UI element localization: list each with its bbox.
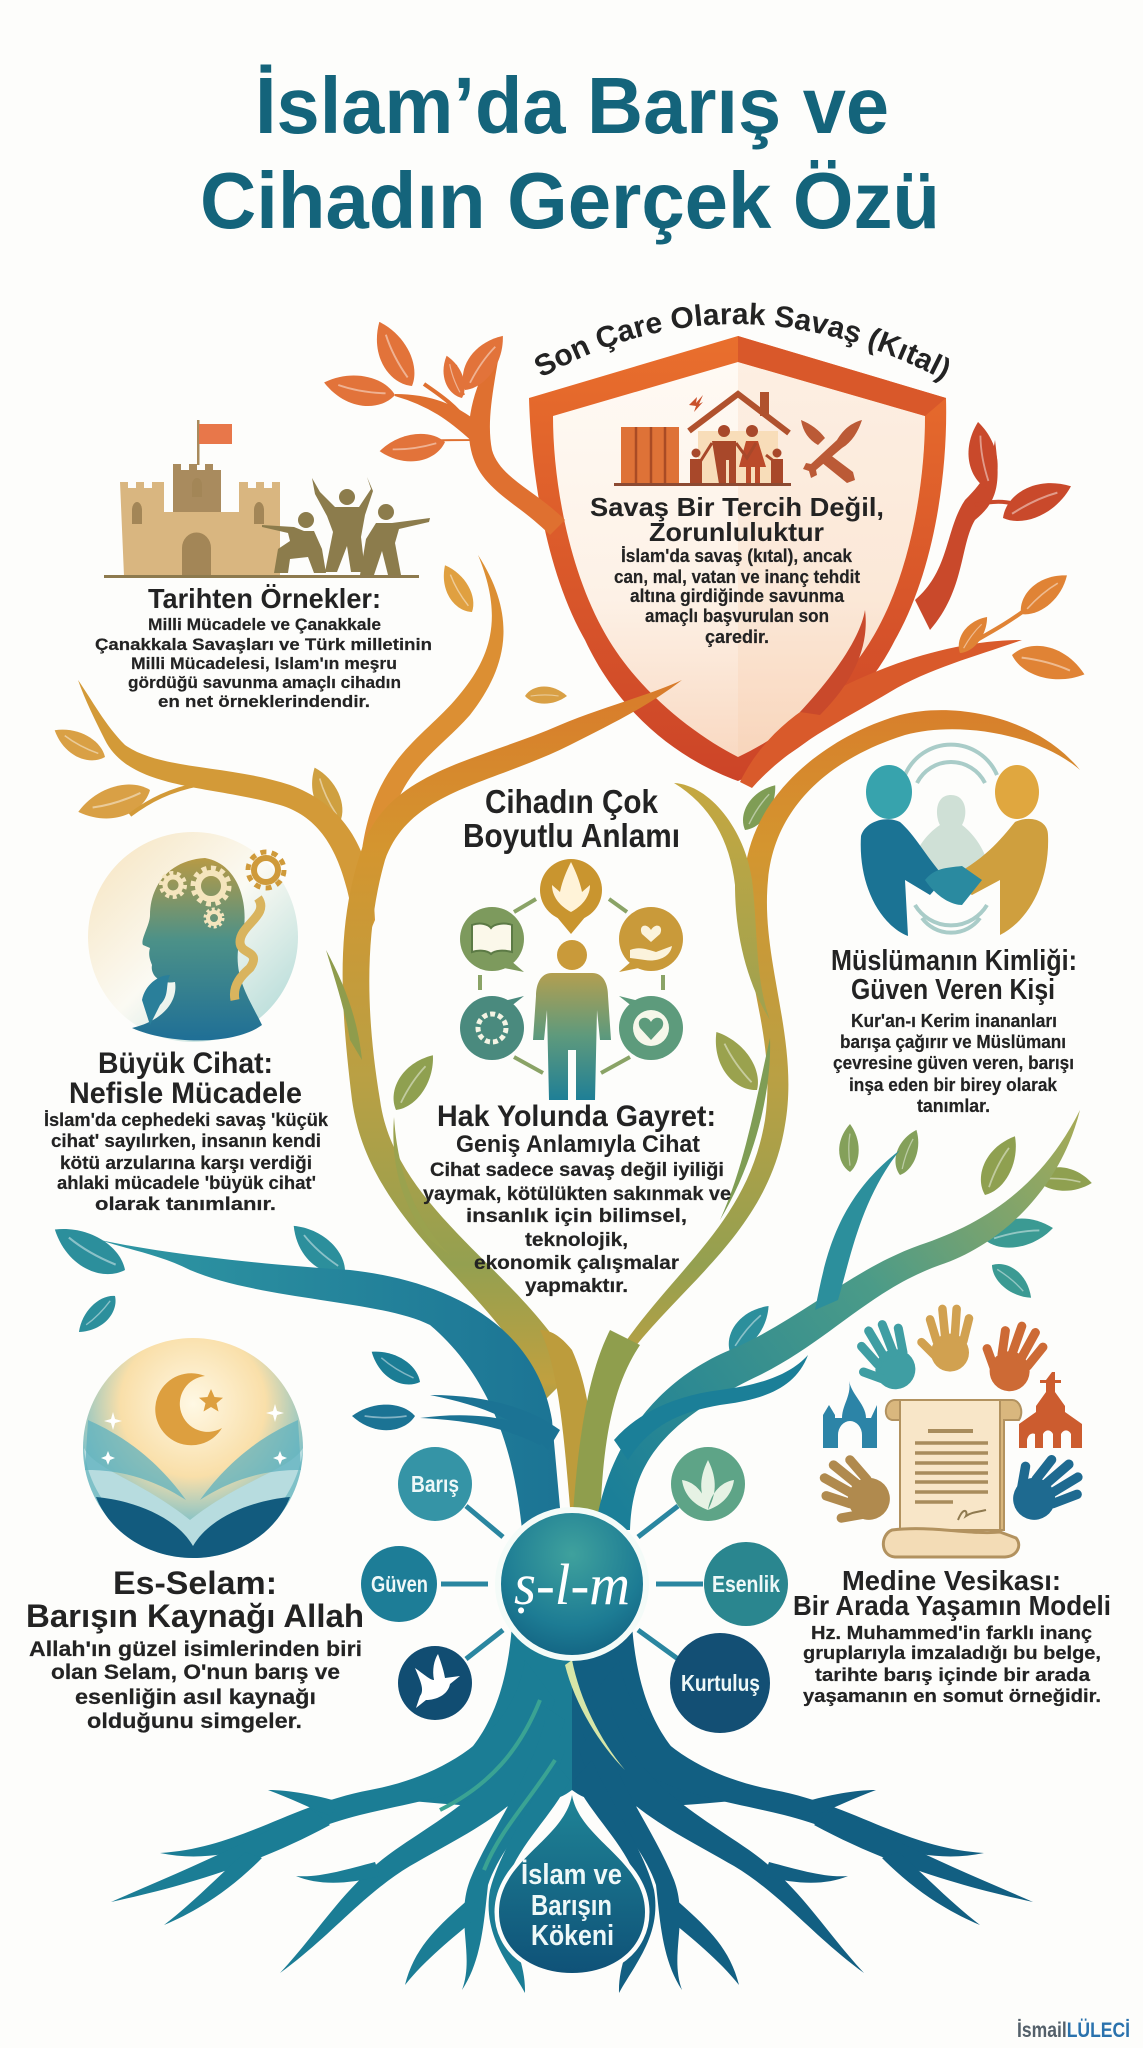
icon: wall, family and swords [614, 392, 862, 486]
icon: head with gears [88, 832, 298, 1042]
text: Büyük Cihat: Nefisle Mücadele [69, 1077, 302, 1110]
text: Müslümanın Kimliği [831, 945, 1077, 1116]
text: Büyük Cihat: kötü arzularına karşı verdiği [60, 1153, 312, 1173]
text: shield: amaçlı başvurulan son [645, 606, 829, 626]
text: Tarihten Örnekler: Milli Mücadele ve Çanakkale [148, 615, 381, 634]
text: Medine Vesikası [793, 1565, 1111, 1706]
text: Hak Yolunda Gayret: insanlık için bilimsel, [466, 1205, 687, 1227]
text: Müslümanın Kimliği: Müslümanın Kimliği: [831, 945, 1077, 977]
root drop label [499, 1795, 645, 1973]
text: Es-Selam: olan Selam, O'nun barış ve [51, 1661, 340, 1684]
title [200, 61, 940, 245]
text: Müslümanın Kimliği: Güven Veren Kişi [851, 974, 1055, 1006]
root drop label: Kökeni [531, 1920, 614, 1952]
node: Barış: Barış [411, 1471, 459, 1497]
text: Medine Vesikası: Medine Vesikası: [842, 1565, 1061, 1596]
text: Hak Yolunda Gayret: ekonomik çalışmalar [474, 1252, 679, 1274]
text: Es-Selam: Es-Selam: [113, 1565, 277, 1601]
text: Tarihten Örnekler: en net örneklerindendir. [158, 692, 370, 711]
shield panel [529, 336, 946, 781]
heading: curved shield title: Son Çare Olarak Savaş (Kıtal) [535, 302, 949, 384]
text: shield: İslam'da savaş (kıtal), ancak [621, 546, 853, 566]
icon: handshake [861, 745, 1048, 936]
heading: Cihadın Çok Boyutlu Anlamı [463, 783, 680, 854]
text: Es-Selam: Barışın Kaynağı Allah [26, 1598, 364, 1634]
text: Tarihten Örnekler [95, 583, 432, 711]
central sphere: s-l-m: ṣ-l-m [514, 1552, 630, 1617]
node: Kurtuluş: Kurtuluş [681, 1670, 760, 1696]
text: shield: çaredir. [705, 627, 769, 647]
node: Esenlik [704, 1542, 788, 1626]
tree: leaves [46, 316, 1093, 1430]
root drop label: İslam ve [521, 1859, 622, 1891]
icon: Medine scroll with hands [811, 1309, 1086, 1557]
text: Hak Yolunda Gayret: Hak Yolunda Gayret: [437, 1100, 716, 1133]
text: Es-Selam: esenliğin asıl kaynağı [75, 1686, 316, 1709]
text: Medine Vesikası: Hz. Muhammed'in farklı inanç [811, 1623, 1092, 1643]
text: Büyük Cihat: cihat' sayılırken, insanın kendi [51, 1131, 321, 1151]
text: Müslümanın Kimliği: çevresine güven veren, barışı [833, 1053, 1074, 1073]
text: Medine Vesikası: yaşamanın en somut örneğidir. [803, 1686, 1101, 1706]
text: Tarihten Örnekler: Milli Mücadelesi, Islam'ın meşru [131, 654, 397, 673]
text: shield [590, 492, 884, 647]
roots [111, 1625, 1033, 1993]
text: shield: altına girdiğinde savunma [630, 586, 845, 606]
icon: crescent and open book [83, 1338, 303, 1558]
node: Esenlik: Esenlik [712, 1571, 780, 1597]
panel: castle and soldiers icon [104, 420, 430, 578]
text: Hak Yolunda Gayret: Geniş Anlamıyla Cihat [456, 1131, 700, 1158]
text: Müslümanın Kimliği: tanımlar. [917, 1096, 990, 1116]
text: Tarihten Örnekler: gördüğü savunma amaçlı cihadın [128, 673, 401, 692]
text: Hak Yolunda Gayret [423, 1100, 731, 1297]
heading: Cihadın Çok Boyutlu Anlamı: Cihadın Çok [485, 783, 659, 820]
text: Müslümanın Kimliği: Kur'an-ı Kerim inananları [851, 1011, 1057, 1031]
text: Tarihten Örnekler: Tarihten Örnekler: [148, 583, 381, 614]
text: Müslümanın Kimliği: inşa eden bir birey olarak [849, 1075, 1058, 1095]
signature: İsmailLÜLECİ [1017, 2019, 1130, 2042]
text: shield: Savaş Bir Tercih Değil, [590, 492, 884, 522]
node: dove [398, 1646, 472, 1720]
icon: person with five bubbles [460, 859, 683, 1100]
text: Tarihten Örnekler: Çanakkala Savaşları ve Türk milletinin [95, 635, 432, 654]
text: Es-Selam [26, 1565, 364, 1733]
node: Güven [361, 1546, 437, 1622]
node: Kurtuluş [670, 1633, 770, 1733]
text: Büyük Cihat: İslam'da cephedeki savaş 'küçük [44, 1110, 329, 1130]
text: Büyük Cihat: ahlaki mücadele 'büyük cihat' [57, 1173, 316, 1193]
text: Büyük Cihat: Büyük Cihat: [98, 1047, 273, 1080]
root drop label: Barışın [531, 1890, 612, 1922]
text: Müslümanın Kimliği: barışa çağırır ve Müslümanı [840, 1032, 1066, 1052]
text: Hak Yolunda Gayret: Cihat sadece savaş değil iyiliği [430, 1159, 724, 1181]
title: İslam’da Barış ve [255, 61, 889, 150]
connectors to S-L-M hub [441, 1506, 703, 1659]
node: leaf [671, 1447, 745, 1521]
text: Medine Vesikası: gruplarıyla imzaladığı bu belge, [803, 1643, 1101, 1663]
text: Medine Vesikası: tarihte barış içinde bir arada [815, 1665, 1091, 1685]
text: Hak Yolunda Gayret: yaymak, kötülükten sakınmak ve [423, 1183, 731, 1205]
text: shield: can, mal, vatan ve inanç tehdit [614, 567, 860, 587]
node: Güven: Güven [371, 1571, 428, 1597]
text: Es-Selam: olduğunu simgeler. [87, 1710, 302, 1733]
tree: upper orange branches [395, 338, 1030, 788]
text: Hak Yolunda Gayret: yapmaktır. [525, 1275, 628, 1297]
node: Barış [398, 1447, 472, 1521]
text: Hak Yolunda Gayret: teknolojik, [525, 1229, 628, 1251]
central sphere: s-l-m [498, 1510, 646, 1658]
title: Cihadın Gerçek Özü [200, 156, 940, 245]
tree: main trunk and branches [78, 555, 1080, 1530]
text: shield: Zorunluluktur [649, 517, 824, 547]
text: Büyük Cihat: olarak tanımlanır. [95, 1194, 276, 1214]
heading: Cihadın Çok Boyutlu Anlamı: Boyutlu Anlamı [463, 817, 680, 854]
text: Büyük Cihat [44, 1047, 329, 1214]
text: Medine Vesikası: Bir Arada Yaşamın Modeli [793, 1590, 1111, 1621]
text: Es-Selam: Allah'ın güzel isimlerinden biri [29, 1638, 362, 1661]
